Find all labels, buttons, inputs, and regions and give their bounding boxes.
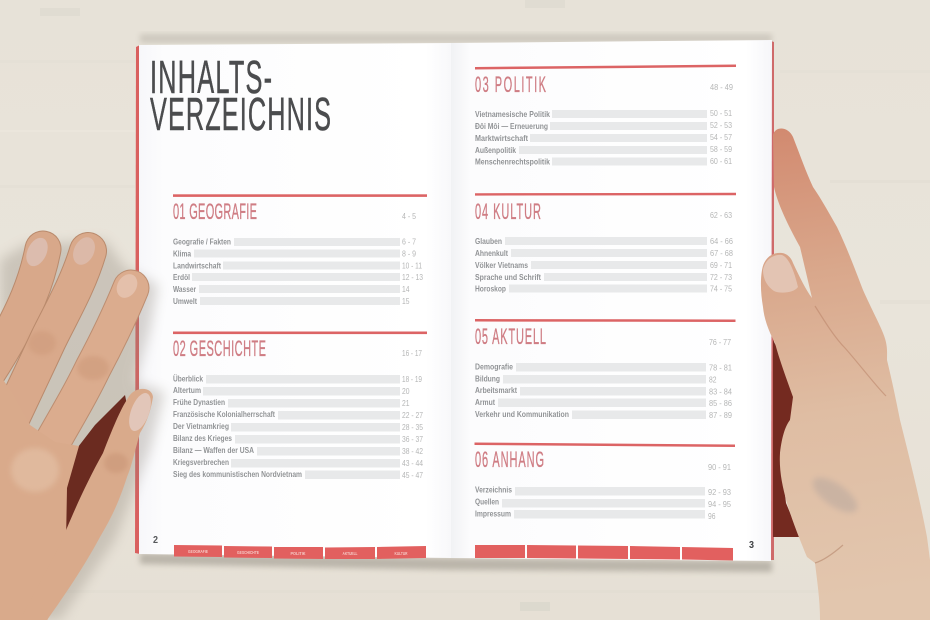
heading 03: 03 POLITIK: [475, 72, 546, 97]
section: 06 Anhang: 96: [708, 511, 716, 521]
section: 02 Geschichte: 21: [402, 398, 410, 408]
fingernail 3: [113, 270, 141, 302]
section: 06 Anhang: 90 - 91: [708, 462, 731, 472]
section: 02 Geschichte: 22 - 27: [402, 410, 423, 420]
section: 05 Aktuell: 87 - 89: [709, 410, 732, 420]
section: 02 Geschichte: 28 - 35: [402, 422, 423, 432]
section: 02 Geschichte: 45 - 47: [402, 470, 423, 480]
ring finger: [8, 251, 88, 425]
red cover edge right: [771, 41, 774, 560]
section: 01 Geografie: Klima: [173, 248, 191, 258]
section: 01 Geografie: 15: [402, 296, 410, 306]
right page: [451, 40, 772, 561]
section: 04 Kultur: Ahnenkult: [475, 248, 508, 258]
heading 01: 01 GEOGRAFIE: [173, 199, 257, 224]
left page tab bar: POLITIK: [290, 551, 306, 556]
section: 04 Kultur: 72 - 73: [710, 272, 732, 282]
vein shading: [807, 471, 863, 519]
booklet: [135, 40, 774, 561]
left page tab bar: GESCHICHTE: [237, 550, 259, 555]
page number 3: 3: [749, 540, 754, 551]
hand shadow: [0, 240, 165, 620]
section: 06 Anhang: Quellen: [475, 496, 499, 506]
section: 03 Politik: [475, 64, 736, 166]
section: 03 Politik: 52 - 53: [710, 120, 732, 130]
wrist crease: [815, 545, 843, 563]
section: 02 Geschichte: Kriegsverbrechen: [173, 457, 229, 467]
palm: [0, 372, 79, 620]
section: 02 Geschichte: Altertum: [173, 385, 201, 395]
section: 04 Kultur: Glauben: [475, 236, 502, 246]
section: 03 Politik: Đôi Môi — Erneuerung: [475, 121, 548, 131]
section: 03 Politik: Marktwirtschaft: [475, 133, 528, 143]
section: 05 Aktuell: Bildung: [475, 374, 500, 384]
section: 03 Politik: 58 - 59: [710, 144, 732, 154]
section: 01 Geografie: 10 - 11: [402, 260, 422, 270]
section: 04 Kultur: Völker Vietnams: [475, 260, 528, 270]
section: 04 Kultur: Horoskop: [475, 284, 506, 294]
section: 05 Aktuell: Armut: [475, 397, 495, 407]
section: 04 Kultur: 62 - 63: [710, 210, 732, 220]
section: 02 Geschichte: 36 - 37: [402, 434, 423, 444]
title: VERZEICHNIS: [150, 88, 331, 140]
section: 02 Geschichte: Sieg des kommunistischen Nordvietnam: [173, 469, 302, 479]
section: 02 Geschichte: 18 - 19: [402, 374, 422, 384]
right page tab bar: [475, 545, 733, 560]
section: 05 Aktuell: 76 - 77: [709, 337, 731, 347]
title: INHALTS-: [150, 51, 272, 103]
thumb: [20, 389, 153, 620]
section: 05 Aktuell: 78 - 81: [709, 362, 732, 372]
section: 04 Kultur: 69 - 71: [710, 260, 732, 270]
section: 01 Geografie: 14: [402, 284, 410, 294]
section: 05 Aktuell: 83 - 84: [709, 386, 732, 396]
middle finger: [45, 288, 131, 455]
heading 05: 05 AKTUELL: [475, 324, 546, 349]
left page tab bar: KULTUR: [394, 551, 408, 556]
section: 05 Aktuell: Demografie: [475, 362, 513, 372]
section: 01 Geografie: Geografie / Fakten: [173, 236, 231, 246]
heading 06: 06 ANHANG: [475, 447, 544, 472]
thumb crease: [815, 306, 886, 396]
page number 2: 2: [153, 535, 158, 546]
section: 02 Geschichte: Französische Kolonialherrschaft: [173, 409, 275, 419]
section: 03 Politik: 60 - 61: [710, 156, 732, 166]
thumbnail: [125, 390, 155, 434]
section: 06 Anhang: 94 - 95: [708, 499, 731, 509]
section: 01 Geografie: 4 - 5: [402, 211, 416, 221]
right hand: [761, 128, 930, 620]
section: 01 Geografie: 6 - 7: [402, 236, 416, 246]
section: 04 Kultur: Sprache und Schrift: [475, 272, 541, 282]
section: 05 Aktuell: Verkehr und Kommunikation: [475, 409, 569, 419]
section: 02 Geschichte: 16 - 17: [402, 348, 422, 358]
section: 05 Aktuell: Arbeitsmarkt: [475, 385, 517, 395]
section: 01 Geografie: Wasser: [173, 284, 197, 294]
section: 01 Geografie: 8 - 9: [402, 248, 416, 258]
section: 04 Kultur: 67 - 68: [710, 248, 733, 258]
section: 03 Politik: 54 - 57: [710, 132, 732, 142]
section: 02 Geschichte: Bilanz — Waffen der USA: [173, 445, 254, 455]
section: 01 Geografie: Erdöl: [173, 272, 190, 282]
section: 02 Geschichte: 20: [402, 386, 410, 396]
section: 06 Anhang: [474, 442, 735, 521]
section: 04 Kultur: [475, 193, 736, 294]
section: 05 Aktuell: 82: [709, 374, 717, 384]
little finger: [0, 249, 43, 372]
section: 03 Politik: Menschenrechtspolitik: [475, 156, 550, 166]
section: 06 Anhang: 92 - 93: [708, 487, 731, 497]
section: 04 Kultur: 64 - 66: [710, 236, 733, 246]
section: 04 Kultur: 74 - 75: [710, 284, 732, 294]
left hand: [0, 234, 165, 620]
section: 02 Geschichte: [173, 332, 427, 480]
section: 02 Geschichte: 43 - 44: [402, 458, 423, 468]
section: 06 Anhang: Verzeichnis: [475, 484, 512, 494]
section: 02 Geschichte: Bilanz des Krieges: [173, 433, 232, 443]
section: 01 Geografie: [173, 194, 427, 306]
left page tab bar: [174, 545, 426, 559]
heading 04: 04 KULTUR: [475, 199, 541, 224]
section: 02 Geschichte: Frühe Dynastien: [173, 397, 225, 407]
dark cover behind hand: [773, 340, 800, 537]
index finger, thumb and back of hand: [761, 128, 930, 620]
section: 01 Geografie: Umwelt: [173, 296, 197, 306]
section: 06 Anhang: Impressum: [475, 508, 511, 518]
section: 05 Aktuell: [475, 319, 736, 420]
heading 02: 02 GESCHICHTE: [173, 336, 266, 361]
section: 01 Geografie: 12 - 13: [402, 272, 423, 282]
section: 03 Politik: 50 - 51: [710, 108, 732, 118]
title: [150, 51, 331, 140]
section: 05 Aktuell: 85 - 86: [709, 398, 732, 408]
knuckle wrinkles: [28, 331, 56, 355]
dark gap between thumb and hand: [64, 395, 130, 541]
left page tab bar: GEOGRAFIE: [188, 549, 208, 554]
section: 03 Politik: 48 - 49: [710, 82, 733, 92]
palm highlight: [11, 448, 59, 492]
section: 01 Geografie: Landwirtschaft: [173, 260, 221, 270]
left page: [139, 43, 451, 558]
section: 03 Politik: Vietnamesische Politik: [475, 109, 550, 119]
section: 02 Geschichte: Überblick: [173, 374, 203, 384]
fingernail 2: [69, 234, 99, 268]
red cover edge left: [135, 45, 140, 554]
section: 02 Geschichte: Der Vietnamkrieg: [173, 421, 229, 431]
section: 02 Geschichte: 38 - 42: [402, 446, 423, 456]
section: 03 Politik: Außenpolitik: [475, 145, 516, 155]
left page tab bar: AKTUELL: [342, 551, 358, 556]
thumbnail: [763, 255, 798, 293]
fingernail 1: [22, 234, 52, 270]
